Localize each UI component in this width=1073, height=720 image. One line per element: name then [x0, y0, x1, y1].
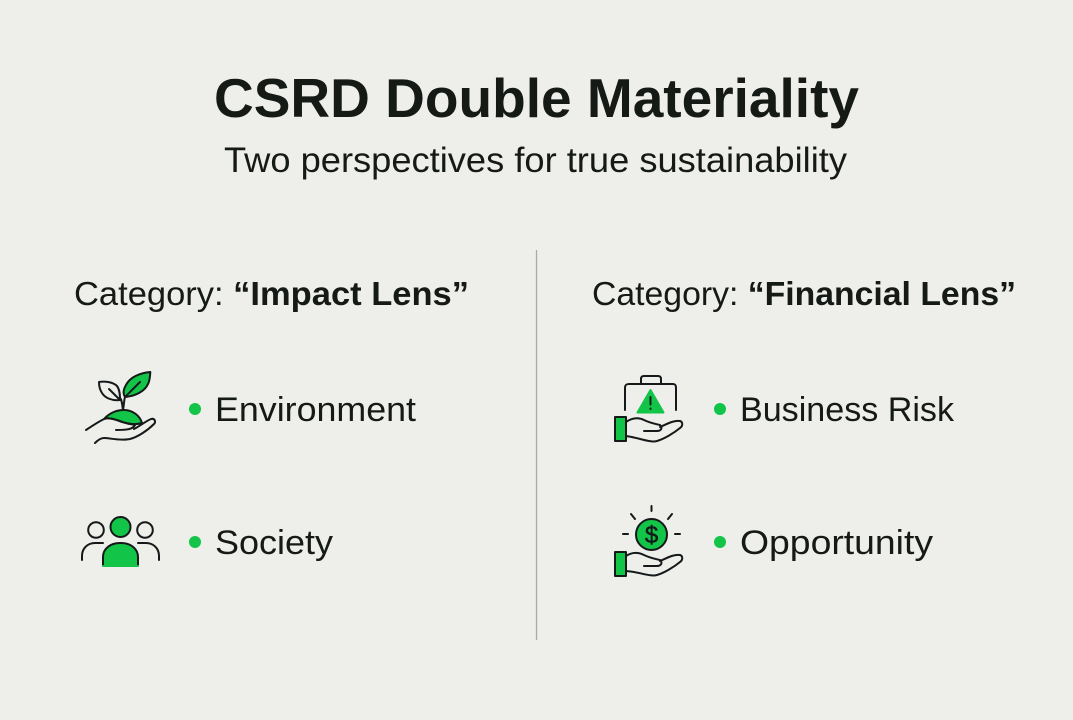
heading: impact lens: Category: “Impact Lens”	[74, 275, 469, 312]
title: CSRD Double Materiality	[214, 67, 859, 129]
icon: dollar opportunity in hand	[615, 506, 682, 576]
panel: financial lens	[592, 275, 1016, 576]
bullet: society	[189, 536, 201, 548]
label: society: Society	[215, 524, 333, 562]
icon: plant in hand	[86, 372, 155, 443]
bullet: business risk	[714, 403, 726, 415]
subtitle: Two perspectives for true sustainability	[224, 141, 848, 180]
icon: briefcase risk in hand	[615, 376, 682, 441]
bullet: environment	[189, 403, 201, 415]
label: environment: Environment	[215, 391, 417, 429]
icon: dollar opportunity in hand: $	[645, 522, 658, 549]
label: opportunity: Opportunity	[740, 524, 933, 562]
icon: people	[82, 517, 159, 566]
panel: impact lens	[74, 275, 469, 566]
label: business risk: Business Risk	[740, 391, 955, 429]
heading: financial lens: Category: “Financial Lens”	[592, 275, 1016, 312]
bullet: opportunity	[714, 536, 726, 548]
